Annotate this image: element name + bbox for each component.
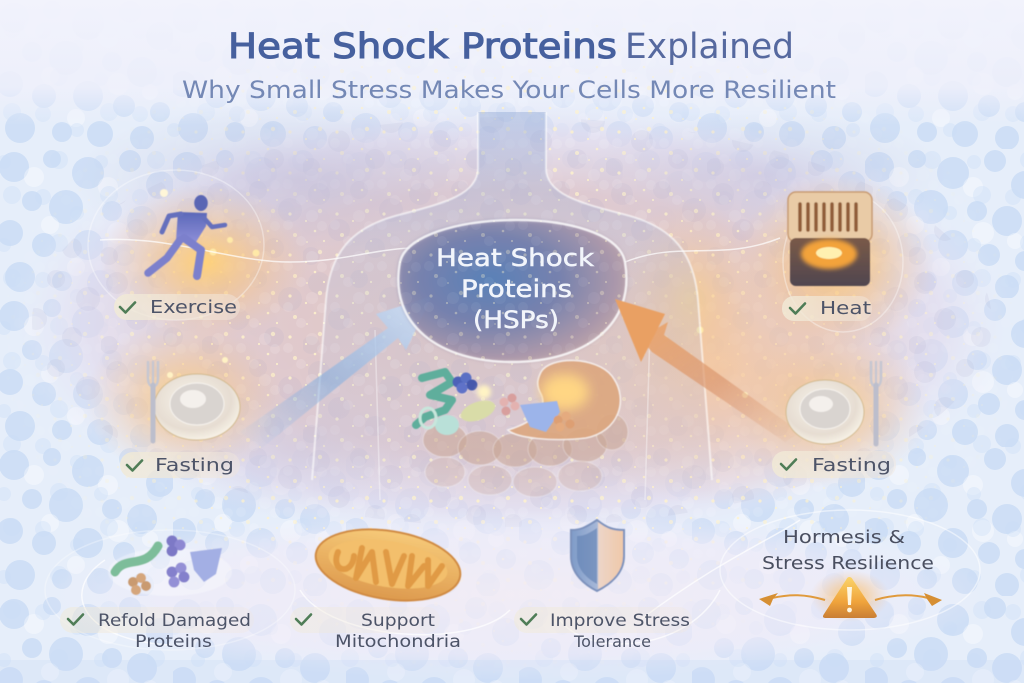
label: refold damaged proteins bbox=[60, 607, 254, 651]
human body silhouette bbox=[312, 112, 712, 500]
icon: plate and fork left bbox=[148, 361, 240, 441]
label: improve stress tolerance: Tolerance bbox=[573, 632, 651, 651]
label: support mitochondria: Mitochondria bbox=[335, 632, 461, 651]
heading: hormesis and stress resilience: Stress Resilience bbox=[762, 553, 934, 574]
label: exercise: Exercise bbox=[150, 297, 237, 318]
title: Explained bbox=[625, 27, 794, 67]
stomach bbox=[508, 360, 620, 440]
central oval: Heat Shock Proteins bbox=[398, 220, 626, 362]
icon: plate and fork right bbox=[786, 361, 881, 444]
central oval: Heat Shock Proteins: Heat Shock bbox=[436, 244, 594, 272]
label: fasting right: Fasting bbox=[812, 455, 891, 476]
icon: running figure bbox=[148, 195, 225, 276]
label: support mitochondria bbox=[290, 607, 461, 651]
arrow: right bbox=[875, 593, 942, 606]
flowing light lines bbox=[45, 170, 980, 650]
label: fasting left bbox=[120, 452, 240, 478]
icon: mitochondrion bbox=[311, 520, 465, 610]
label: improve stress tolerance bbox=[514, 607, 692, 651]
subtitle: Why Small Stress Makes Your Cells More Resilient bbox=[182, 76, 836, 104]
central oval: Heat Shock Proteins: Proteins bbox=[461, 275, 572, 303]
label: heat bbox=[782, 296, 872, 321]
heading: hormesis and stress resilience bbox=[762, 527, 934, 574]
icon: refold proteins bbox=[108, 536, 232, 596]
icon: warning triangle bbox=[810, 570, 890, 622]
arrow: orange pointing to HSPs bbox=[615, 299, 800, 442]
label: improve stress tolerance: Improve Stress bbox=[550, 611, 690, 630]
arrow: blue pointing to HSPs bbox=[240, 296, 432, 448]
title: Heat Shock Proteins bbox=[228, 27, 617, 67]
central oval: Heat Shock Proteins: (HSPs) bbox=[473, 306, 559, 334]
arrow: left bbox=[759, 593, 825, 606]
label: support mitochondria: Support bbox=[361, 611, 436, 630]
label: fasting left: Fasting bbox=[155, 455, 234, 476]
label: refold damaged proteins: Refold Damaged bbox=[98, 611, 251, 630]
title bbox=[228, 27, 794, 67]
label: fasting right bbox=[772, 451, 896, 478]
icon: heat device bbox=[788, 192, 872, 286]
proteins cluster bbox=[416, 372, 574, 435]
label: exercise bbox=[114, 294, 240, 320]
label: heat: Heat bbox=[820, 298, 871, 319]
intestines bbox=[423, 414, 628, 497]
icon: shield bbox=[571, 520, 624, 591]
heading: hormesis and stress resilience: Hormesis & bbox=[783, 527, 905, 548]
label: refold damaged proteins: Proteins bbox=[135, 632, 212, 651]
